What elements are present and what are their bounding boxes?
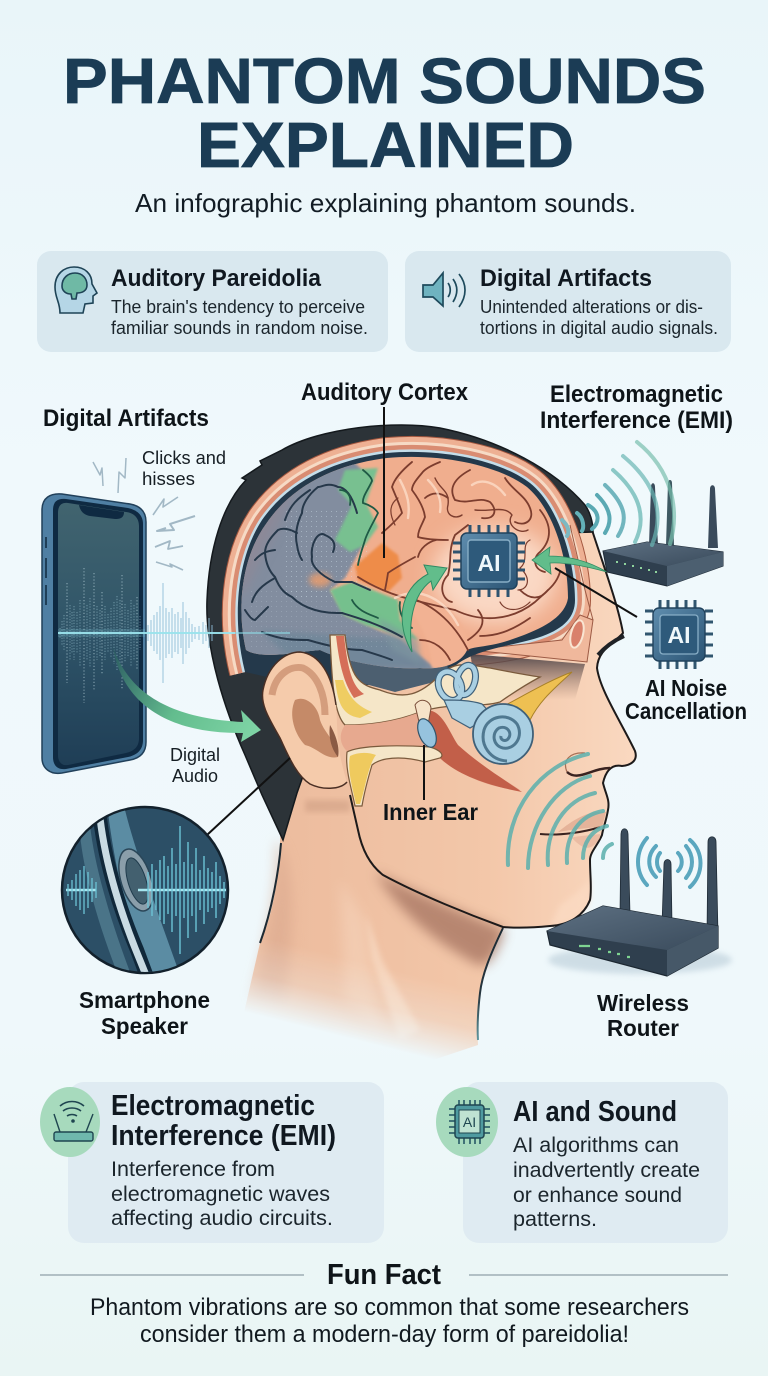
icon: AI chip in green circle: AI <box>463 1114 476 1130</box>
description: familiar sounds in random noise. <box>111 318 368 338</box>
label: electromagnetic interference: Electromagnetic <box>550 381 723 408</box>
icon: static sparks <box>93 458 195 570</box>
arrow: temporal lobe to AI chip <box>402 565 447 652</box>
icon: head with brain <box>55 267 97 313</box>
arrow: router to AI chip <box>532 547 607 574</box>
ossicles <box>415 700 431 726</box>
fun fact text: consider them a modern-day form of pareidolia! <box>140 1321 629 1348</box>
icon: AI chip in brain: AI <box>478 550 500 576</box>
brain folds: grey lobe <box>245 485 402 660</box>
brain folds: green area <box>340 470 412 628</box>
description: electromagnetic waves <box>111 1183 330 1206</box>
illustration: head cross-section <box>207 425 636 1060</box>
description <box>480 297 718 338</box>
description: tortions in digital audio signals. <box>480 318 718 338</box>
label: wireless router: Router <box>607 1015 679 1041</box>
icon: AI chip in green circle <box>436 1087 498 1157</box>
label: wireless router <box>597 990 689 1041</box>
heading: Interference (EMI) <box>111 1120 336 1152</box>
brain <box>230 452 575 692</box>
label: electromagnetic interference: Interference (EMI) <box>540 407 733 434</box>
smartphone speaker magnifier <box>62 807 228 985</box>
phone notch <box>79 505 124 519</box>
face sound waves <box>508 754 612 868</box>
heading <box>111 1090 336 1152</box>
router: EMI source <box>603 480 723 586</box>
label: digital audio: Audio <box>172 766 218 786</box>
panel: AI and sound <box>436 1082 728 1243</box>
label: AI noise cancellation <box>625 675 747 724</box>
face and neck <box>240 530 636 1060</box>
icon: AI noise cancellation chip: AI <box>668 622 690 648</box>
title: EXPLAINED <box>197 109 574 181</box>
icon: speaker <box>423 273 465 307</box>
label: clicks and hisses <box>142 448 226 489</box>
panel: auditory pareidolia <box>37 251 388 352</box>
fun fact text <box>90 1294 689 1348</box>
label: AI noise cancellation: Cancellation <box>625 698 747 724</box>
EMI waves <box>562 442 674 545</box>
arrow: phone to ear <box>113 647 261 742</box>
description: inadvertently create <box>513 1159 700 1182</box>
router waves <box>638 838 700 887</box>
brain highlights <box>395 480 505 625</box>
waveform: digital audio <box>58 568 290 703</box>
hair <box>207 425 593 840</box>
description: Interference from <box>111 1158 275 1181</box>
description: AI algorithms can <box>513 1134 679 1157</box>
callout line: inner ear <box>423 745 425 800</box>
label: wireless router: Wireless <box>597 990 689 1016</box>
icon: AI chip in brain <box>453 525 525 597</box>
phone <box>42 494 146 773</box>
heading: AI and Sound <box>513 1096 677 1128</box>
nerve <box>500 672 572 720</box>
description <box>513 1134 700 1231</box>
cochlea <box>473 704 533 764</box>
semicircular canals <box>434 663 479 704</box>
icon: router in green circle <box>40 1087 100 1157</box>
label: electromagnetic interference <box>540 381 733 434</box>
callout line: AI noise cancellation <box>555 568 637 617</box>
label: digital artifacts: Digital Artifacts <box>43 405 209 432</box>
phone side buttons <box>45 537 47 605</box>
fun fact heading: Fun Fact <box>327 1259 441 1291</box>
label: inner ear: Inner Ear <box>383 799 478 825</box>
panel: digital artifacts <box>405 251 731 352</box>
label: auditory cortex: Auditory Cortex <box>301 379 469 406</box>
fun fact text: Phantom vibrations are so common that some researchers <box>90 1294 689 1321</box>
label: clicks and hisses: Clicks and <box>142 448 226 468</box>
icon: AI noise cancellation chip <box>645 600 713 669</box>
heading: Electromagnetic <box>111 1090 315 1122</box>
label: clicks and hisses: hisses <box>142 469 195 489</box>
title <box>63 45 706 181</box>
description: The brain's tendency to perceive <box>111 297 365 317</box>
description <box>111 1158 333 1230</box>
label: smartphone speaker: Smartphone <box>79 987 210 1013</box>
callout line: speaker to ear <box>207 758 290 835</box>
ear <box>262 652 347 788</box>
title: PHANTOM SOUNDS <box>63 45 706 117</box>
nose and eye detail <box>540 636 624 848</box>
label: digital audio <box>170 745 220 786</box>
shadow under brain <box>470 654 585 700</box>
description <box>111 297 368 338</box>
router: wireless router <box>547 829 732 976</box>
callout line: auditory cortex <box>383 407 385 558</box>
forehead bone and sinus <box>470 525 593 662</box>
inner ear anatomy <box>330 635 572 806</box>
panel: electromagnetic interference <box>40 1082 384 1243</box>
description: or enhance sound <box>513 1184 682 1207</box>
skull layers <box>238 452 575 672</box>
description: affecting audio circuits. <box>111 1207 333 1230</box>
label: digital audio: Digital <box>170 745 220 765</box>
label: AI noise cancellation: AI Noise <box>645 675 727 701</box>
heading: Digital Artifacts <box>480 265 652 292</box>
label: smartphone speaker: Speaker <box>101 1013 188 1039</box>
subtitle: An infographic explaining phantom sounds. <box>135 188 636 218</box>
description: Unintended alterations or dis- <box>480 297 703 317</box>
eardrum <box>414 716 440 750</box>
heading: Auditory Pareidolia <box>111 265 322 292</box>
brain folds: salmon lobe <box>358 462 560 660</box>
label: smartphone speaker <box>79 987 210 1039</box>
description: patterns. <box>513 1208 597 1231</box>
